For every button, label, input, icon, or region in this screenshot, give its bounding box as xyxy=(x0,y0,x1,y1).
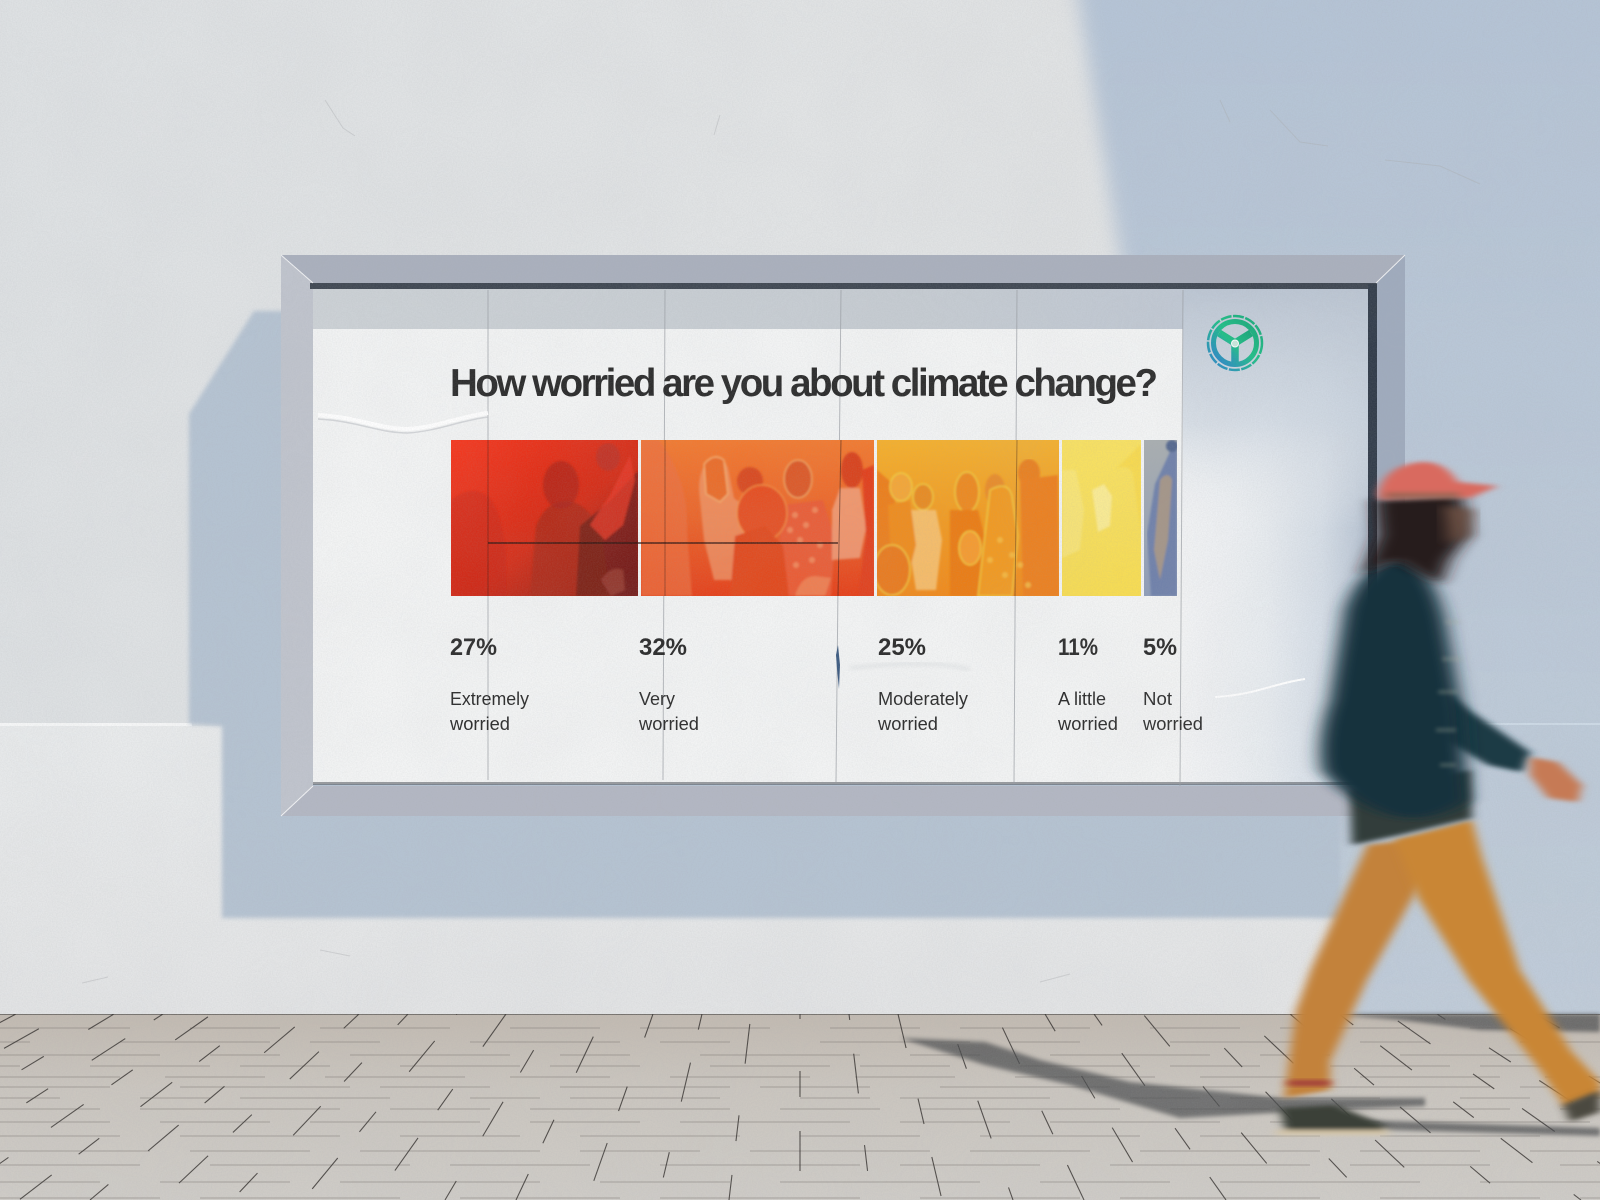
billboard cast shadow xyxy=(189,311,1340,918)
percentages: 11% xyxy=(1058,634,1098,661)
percentages: 32% xyxy=(639,634,687,661)
lower jacket xyxy=(1350,770,1472,845)
walking person xyxy=(1276,462,1600,1135)
stacked bar: worry levels xyxy=(451,440,1178,596)
title: How worried are you about climate change? xyxy=(450,362,1158,405)
segment: a little worried 11% photo xyxy=(1062,440,1141,596)
back leg xyxy=(1284,835,1450,1098)
percentages: 27% xyxy=(450,634,497,661)
segment: extremely worried 27% photo xyxy=(451,440,638,596)
sock band xyxy=(1288,1080,1330,1086)
walker shadow on pavement xyxy=(900,1014,1600,1136)
front leg xyxy=(1395,820,1600,1108)
category labels: Moderately xyxy=(878,688,969,709)
logo: steering wheel badge xyxy=(1208,316,1262,370)
cap xyxy=(1378,462,1498,500)
poster paper xyxy=(313,289,1368,786)
category labels xyxy=(449,688,1203,734)
sleeve xyxy=(1445,690,1530,772)
category labels: worried xyxy=(449,713,510,734)
category labels: worried xyxy=(1057,713,1118,734)
category labels: Very xyxy=(639,688,676,709)
percentages: 25% xyxy=(878,634,926,661)
shoe left xyxy=(1276,1105,1388,1135)
percentages xyxy=(450,634,1177,661)
category labels: Extremely xyxy=(450,688,530,709)
category labels: worried xyxy=(877,713,938,734)
hand xyxy=(1530,757,1582,802)
segment: moderately worried 25% photo xyxy=(874,440,1059,596)
jacket motion streaks xyxy=(1436,622,1462,765)
percentages: 5% xyxy=(1143,634,1177,661)
billboard frame xyxy=(281,255,1405,816)
category labels: worried xyxy=(1142,713,1203,734)
category labels: A little xyxy=(1058,688,1106,709)
hair xyxy=(1362,495,1468,585)
face xyxy=(1445,505,1472,545)
category labels: worried xyxy=(638,713,699,734)
shoe right xyxy=(1563,1090,1600,1122)
pavement xyxy=(0,1012,1600,1200)
category labels: Not xyxy=(1143,688,1172,709)
torso jacket xyxy=(1320,558,1468,818)
poster fold lines over the bar xyxy=(488,440,1017,596)
segment: very worried 32% photo xyxy=(641,440,874,596)
segment: not worried 5% photo xyxy=(1144,440,1178,596)
